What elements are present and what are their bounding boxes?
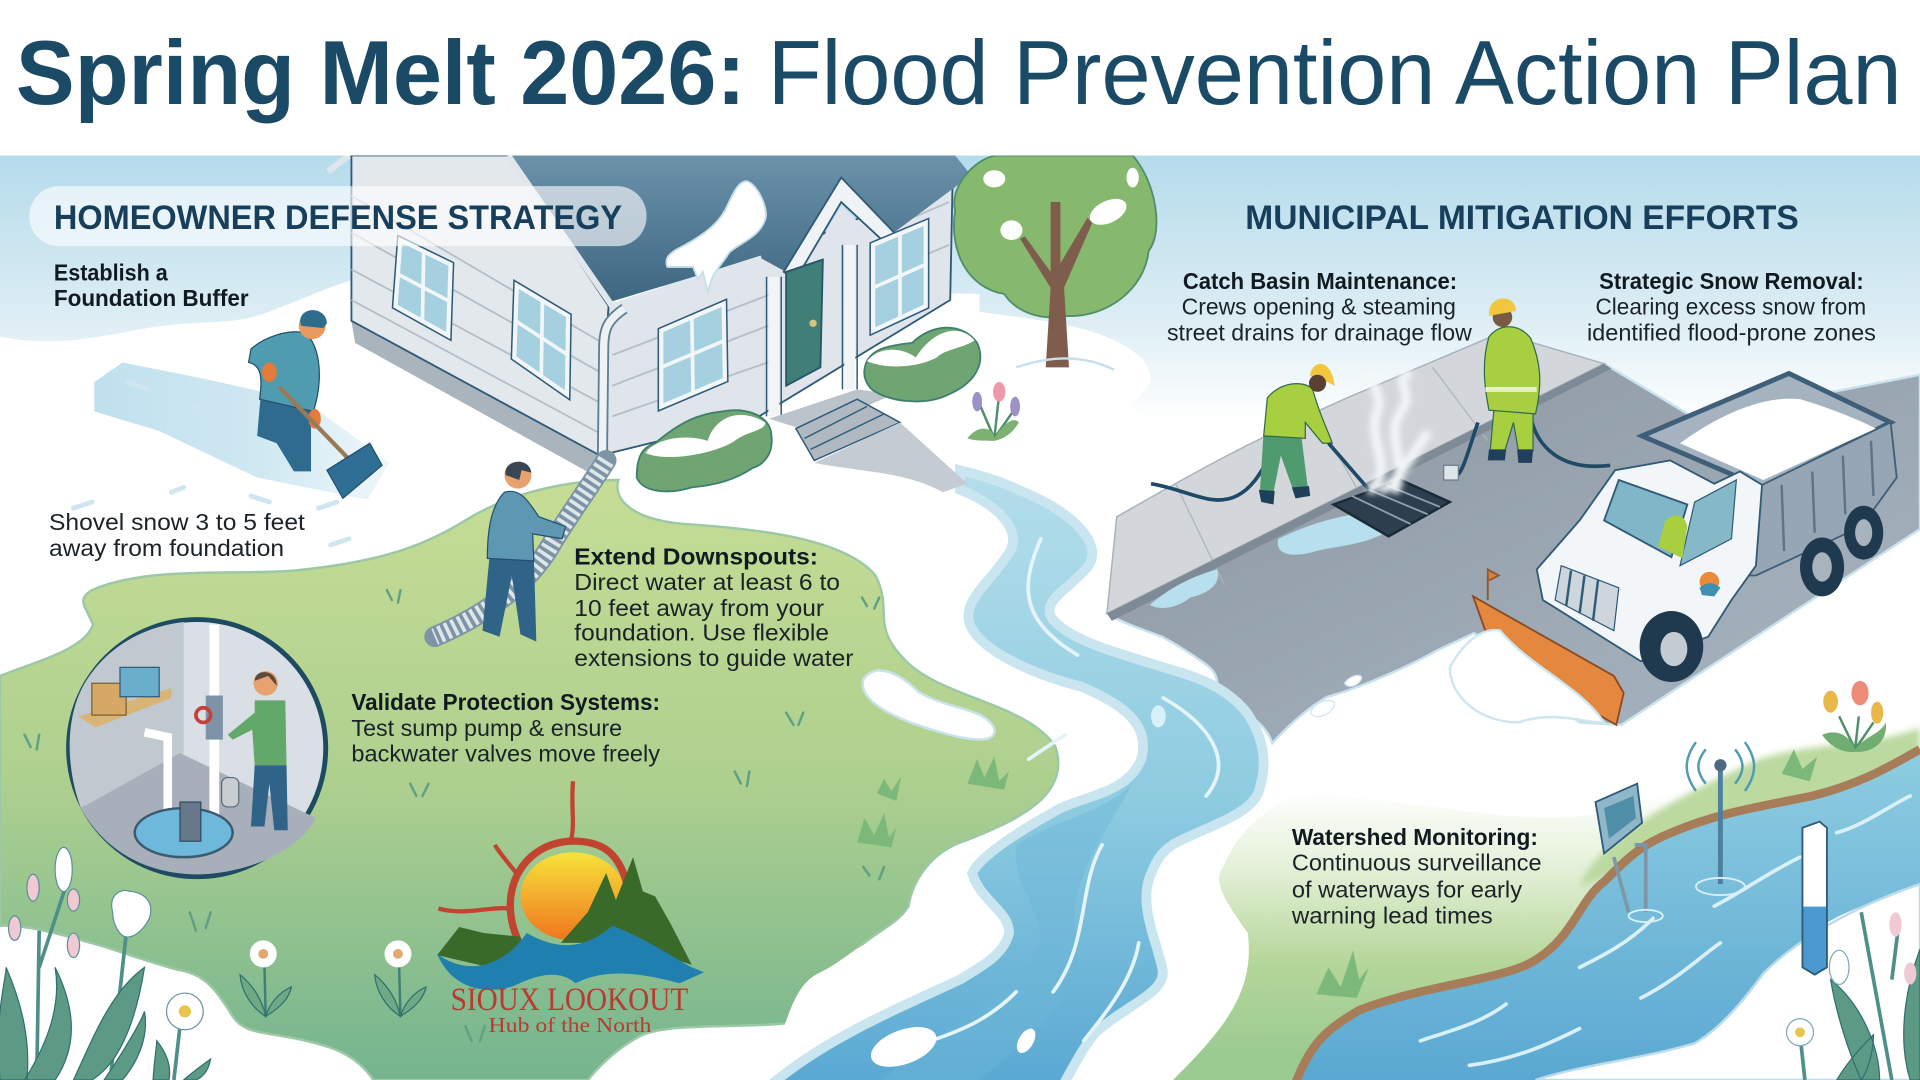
shelf: [78, 688, 171, 727]
text: shovel snow: [49, 509, 305, 561]
truck: plow flag: [1488, 569, 1499, 600]
sidewalk joints: [1176, 367, 1488, 585]
house: downspout: [602, 309, 624, 456]
hose: [1457, 416, 1610, 475]
text: strategic snow removal: Strategic Snow Removal:: [1599, 268, 1864, 294]
circular sump pump inset: [69, 620, 326, 877]
steam: [1371, 373, 1427, 490]
logo waves and fish: [437, 926, 704, 990]
flowers bottom left: [0, 847, 211, 1080]
creek mud bank: [1293, 749, 1920, 1080]
front path: [814, 422, 967, 492]
person shovelling: [249, 310, 382, 498]
creek ripples: [1420, 796, 1910, 1065]
title: [16, 23, 1902, 124]
head and helmet: [1493, 307, 1512, 327]
bush by downspout: [637, 410, 772, 491]
sensor panel: [1596, 784, 1642, 853]
porch steps: [796, 399, 900, 460]
house: main roof: [508, 156, 971, 301]
house: left wall: [351, 156, 609, 456]
right lawn: [1173, 727, 1920, 1080]
logo forest: [437, 857, 692, 967]
daisy one: [240, 940, 291, 1016]
road: [1107, 364, 1920, 743]
legs: [1260, 429, 1308, 492]
truck: windshield: [1604, 480, 1687, 557]
worker at drain: [1151, 364, 1378, 504]
text: foundation buffer: [54, 259, 249, 311]
catch basin grate: [1333, 480, 1450, 536]
house: window 1: [396, 240, 451, 336]
body: [487, 491, 566, 561]
snow mound under tree: [943, 306, 1187, 514]
text: foundation buffer: Establish a: [54, 259, 169, 285]
text: catch basin maintenance: Crews opening & steaming: [1182, 294, 1456, 320]
title band: [0, 0, 1920, 156]
text: extend downspouts: Extend Downspouts:: [574, 543, 818, 569]
truck: rear wheels: [1800, 538, 1844, 596]
green band along upper bank: [1580, 727, 1920, 888]
truck: cab: [1537, 460, 1762, 661]
logo sun rays: [438, 781, 573, 911]
flowers bottom right: [1787, 912, 1920, 1080]
right creek: [1293, 749, 1920, 1080]
title: Flood Prevention Action Plan: [768, 23, 1902, 124]
text: extend downspouts: extensions to guide water: [574, 645, 854, 671]
boots: [1259, 486, 1310, 504]
house: window 2: [514, 285, 568, 394]
text: watershed monitoring: [1291, 824, 1542, 928]
boots: [1488, 449, 1533, 463]
snow patch on lawn: [863, 671, 995, 739]
house: gable face: [796, 206, 891, 284]
bottom-right snow patch: [1536, 884, 1920, 1080]
truck: front wheel: [1640, 611, 1703, 682]
text: catch basin maintenance: [1167, 268, 1472, 345]
shovel: [279, 387, 348, 458]
truck: door logo: [1700, 572, 1719, 591]
floor: [81, 753, 316, 874]
text: foundation buffer: Foundation Buffer: [54, 285, 249, 311]
jacket: [249, 332, 319, 411]
tree: [954, 156, 1156, 370]
spring tulips right: [1822, 681, 1886, 752]
house: porch gable: [784, 178, 900, 279]
hose: [1151, 435, 1286, 500]
shovel cleared patch: [94, 362, 389, 500]
text: validate protection systems: backwater valves move freely: [351, 741, 660, 767]
pipes: [210, 624, 218, 820]
monitoring equipment: [1596, 742, 1827, 975]
house: window 4: [873, 223, 926, 331]
text: watershed monitoring: of waterways for early: [1292, 877, 1522, 903]
flexible downspout hose: [435, 460, 606, 637]
house: [328, 156, 971, 480]
logo: Sioux Lookout: [437, 781, 704, 1037]
valve: [206, 696, 223, 740]
house: porch columns: [774, 245, 850, 416]
sidewalk: [1107, 333, 1604, 613]
porch floor: [769, 389, 894, 431]
truck: grille: [1555, 566, 1619, 631]
head and hat: [299, 312, 326, 339]
heading pill: homeowner: HOMEOWNER DEFENSE STRATEGY: [54, 199, 622, 237]
text: catch basin maintenance: street drains for drainage flow: [1167, 319, 1472, 345]
icon: tulips by path: [967, 382, 1020, 441]
step edges: [804, 407, 884, 449]
truck: snow load: [1680, 399, 1876, 480]
heading: municipal: MUNICIPAL MITIGATION EFFORTS: [1245, 199, 1799, 237]
plowed snow mound: [1450, 630, 1604, 722]
text: extend downspouts: 10 feet away from your: [574, 595, 824, 621]
snow hill left: [0, 279, 980, 514]
river darker current: [882, 784, 1133, 1080]
truck: plow blade: [1473, 596, 1624, 725]
logo sun: [520, 852, 626, 940]
house: foundation: [351, 321, 602, 480]
text: extend downspouts: [574, 543, 854, 671]
water ripples: [1696, 878, 1745, 895]
text: shovel snow: Shovel snow 3 to 5 feet: [49, 509, 305, 535]
snow chips by road: [1310, 675, 1362, 717]
river ripples: [931, 539, 1219, 1041]
text: validate protection systems: Validate Protection Systems:: [351, 689, 660, 715]
text: extend downspouts: foundation. Use flexible: [574, 619, 829, 645]
body: [1484, 327, 1540, 414]
technician: [253, 671, 278, 696]
background: sky: [0, 156, 1920, 422]
text: strategic snow removal: identified flood-prone zones: [1587, 319, 1876, 345]
logo tagline: Hub of the North: [489, 1013, 652, 1037]
left wall: [70, 622, 184, 808]
curb: [1107, 364, 1611, 621]
daisy two: [375, 940, 426, 1016]
grass tufts: [24, 590, 884, 1041]
logo sun ring: [510, 841, 627, 943]
legs: [257, 394, 312, 471]
antenna pole: [1718, 765, 1722, 884]
house: door: [786, 260, 823, 386]
text: catch basin maintenance: Catch Basin Maintenance:: [1183, 268, 1457, 294]
truck: bed interior: [1642, 373, 1891, 487]
text: validate protection systems: Test sump pump & ensure: [351, 715, 622, 741]
sump basin: [135, 808, 233, 857]
house: right wall: [600, 178, 953, 456]
legs: [482, 553, 536, 642]
text: extend downspouts: Direct water at least 6 to: [574, 569, 840, 595]
truck: side window: [1680, 480, 1736, 566]
staff gauge: [1802, 822, 1827, 975]
heading pill: homeowner: [29, 186, 647, 246]
melt puddle near drain: [1278, 494, 1434, 555]
house: window 3: [661, 304, 725, 407]
text: shovel snow: away from foundation: [49, 535, 284, 561]
snow drift texture: [73, 382, 349, 545]
antenna signal arcs: [1687, 742, 1754, 791]
house: roof snow: [666, 181, 766, 291]
text: watershed monitoring: Watershed Monitoring:: [1292, 824, 1538, 850]
text: watershed monitoring: warning lead times: [1291, 902, 1493, 928]
text: validate protection systems: [351, 689, 660, 767]
text: strategic snow removal: Clearing excess snow from: [1596, 294, 1866, 320]
truck: bed side: [1714, 422, 1897, 576]
logo wordmark: SIOUX LOOKOUT: [451, 982, 688, 1018]
snow chunks at lawn edge: [784, 940, 909, 1035]
left lawn: [0, 480, 1058, 1080]
main meltwater river: [765, 470, 1264, 1080]
worker standing: [1444, 298, 1610, 480]
title: Spring Melt 2026:: [16, 23, 746, 124]
legs: [1490, 410, 1533, 451]
text: watershed monitoring: Continuous surveillance: [1292, 850, 1542, 876]
snow plow truck: [1473, 373, 1897, 725]
melt puddle near curb: [1150, 569, 1218, 608]
text: strategic snow removal: [1587, 268, 1876, 345]
float: [222, 778, 239, 807]
head: [504, 462, 531, 489]
body: [1264, 384, 1332, 443]
house: eave trim: [328, 156, 762, 306]
person extending downspout: [435, 460, 606, 642]
grass clumps: [857, 749, 1817, 998]
nozzle: [1329, 443, 1378, 500]
house: siding lines: [351, 196, 949, 435]
helmet: [1310, 364, 1335, 386]
bush right of porch: [864, 328, 980, 401]
gloves: [262, 362, 277, 382]
